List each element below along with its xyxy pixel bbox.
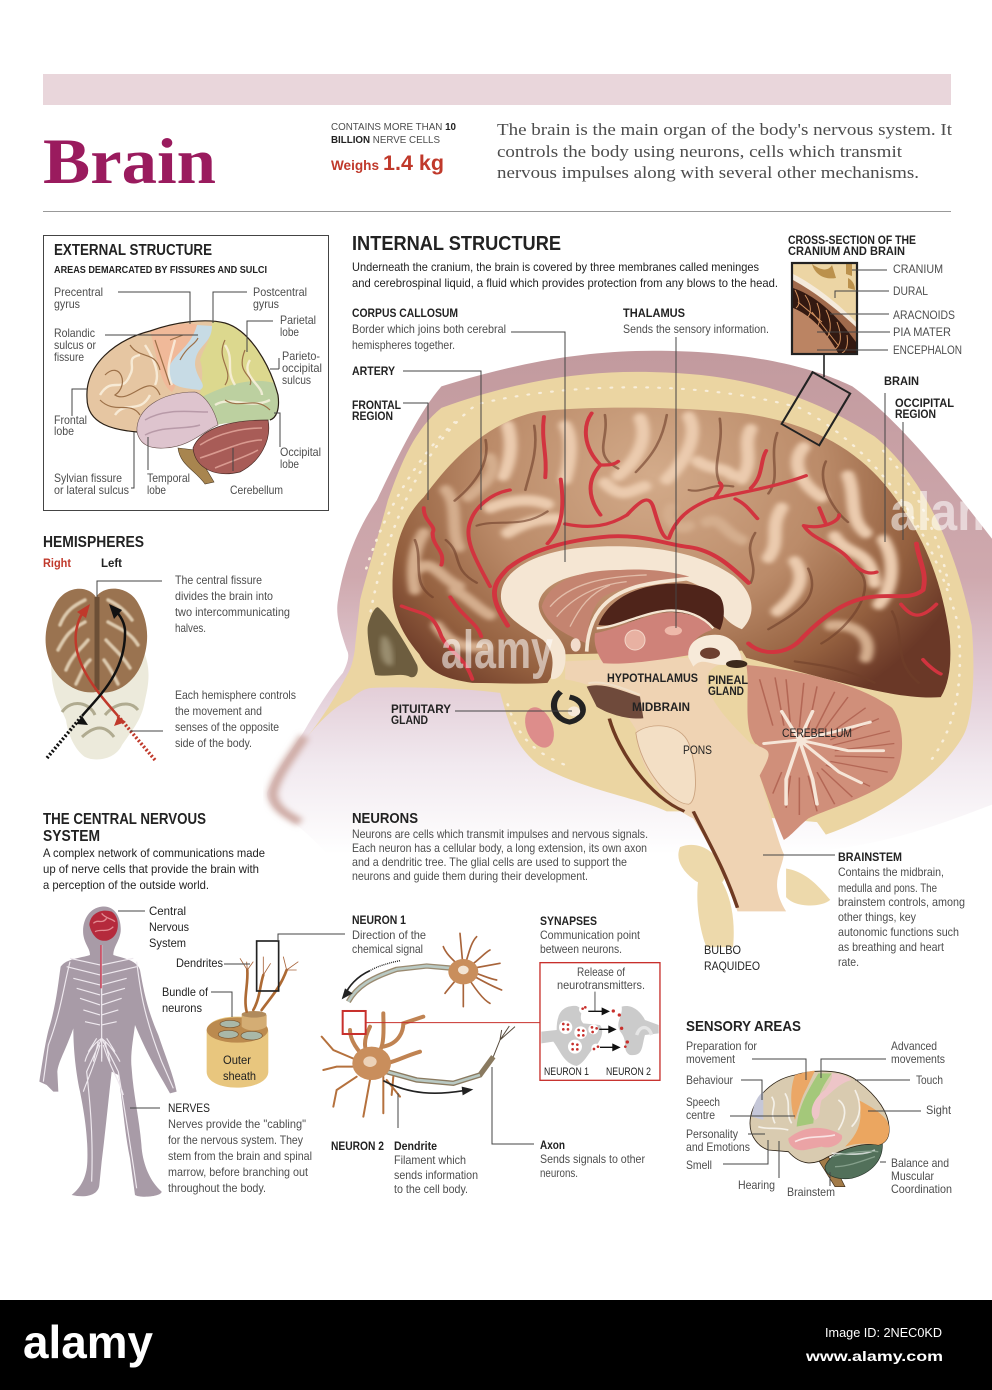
brainstem text: autonomic functions such — [838, 925, 959, 939]
frontal region label: REGION — [352, 409, 393, 423]
legend right left: Left — [101, 556, 122, 570]
sensory labels: Personality — [686, 1127, 738, 1141]
sensory labels: movements — [891, 1052, 945, 1066]
sensory labels: movement — [686, 1052, 736, 1066]
subheading: AREAS DEMARCATED BY FISSURES AND SULCI — [54, 264, 267, 276]
cns labels: System — [149, 936, 186, 950]
key facts: CONTAINS MORE THAN 10 — [331, 121, 456, 133]
heading internal structure: INTERNAL STRUCTURE — [352, 233, 561, 255]
crossing arrows — [47, 604, 155, 760]
human figure — [39, 907, 177, 1197]
labels left: Frontal — [54, 413, 87, 427]
skull with brain — [46, 589, 149, 759]
sensory labels: Brainstem — [787, 1185, 835, 1199]
structure labels: CEREBELLUM — [782, 726, 852, 740]
cns text — [43, 846, 265, 892]
heading sensory: SENSORY AREAS — [686, 1018, 801, 1035]
neuron 2 label: NEURON 2 — [331, 1139, 384, 1153]
labels left: occipital — [282, 361, 322, 375]
structure labels: OCCIPITAL — [895, 396, 954, 410]
synapse labels — [544, 965, 651, 1078]
panel: internal structure text — [352, 233, 965, 973]
panel: external structure — [44, 236, 328, 510]
structure labels: RAQUIDEO — [704, 959, 760, 973]
nerves text: NERVES — [168, 1101, 210, 1115]
dendrite label: Filament which — [394, 1153, 466, 1167]
brain hemisphere — [393, 408, 950, 697]
leader lines cns — [118, 911, 345, 1108]
structure labels — [391, 374, 954, 973]
corpus callosum label — [352, 306, 506, 352]
structure labels: REGION — [895, 407, 936, 421]
sensory labels: Muscular — [891, 1169, 934, 1183]
labels left: Postcentral — [253, 285, 307, 299]
corpus callosum label: hemispheres together. — [352, 338, 455, 352]
neurons text: Neurons are cells which transmit impulses and nervous signals. — [352, 827, 648, 841]
inner brain structures — [542, 570, 747, 719]
heading external structure: EXTERNAL STRUCTURE — [54, 242, 212, 259]
cns labels: Nervous — [149, 920, 189, 934]
frontal sinus — [368, 607, 418, 677]
footer logo: alamy — [23, 1316, 153, 1368]
inset heading: CRANIUM AND BRAIN — [788, 244, 905, 258]
neurons text: Each neuron has a cellular body, a long extension, its own axon — [352, 841, 647, 855]
corpus callosum label: Border which joins both cerebral — [352, 322, 506, 336]
neurons text: and a dendritic tree. The glial cells are used to support the — [352, 855, 627, 869]
sensory labels: Balance and — [891, 1156, 949, 1170]
labels left: sulcus or — [54, 338, 96, 352]
sensory labels — [686, 1039, 952, 1199]
brainstem text: medulla and pons. The — [838, 881, 937, 895]
neuron 1 — [348, 933, 502, 1007]
neurons text: neurons and guide them during their development. — [352, 869, 588, 883]
pons — [636, 726, 696, 804]
midbrain shadow and channels — [609, 719, 737, 908]
heading hemispheres: HEMISPHERES — [43, 534, 144, 551]
cerebellum — [746, 665, 902, 840]
leader lines hemispheres — [97, 581, 163, 731]
sensory labels: and Emotions — [686, 1140, 750, 1154]
sensory labels: Touch — [916, 1073, 943, 1087]
sensory brain — [750, 1071, 889, 1187]
labels left: gyrus — [253, 297, 279, 311]
direction arrows — [370, 961, 400, 971]
synapse labels: NEURON 1 — [544, 1066, 589, 1078]
neurons text — [352, 827, 648, 883]
inset labels: PIA MATER — [893, 325, 951, 339]
nerves text — [168, 1101, 312, 1195]
sensory leader lines — [723, 1059, 921, 1186]
structure labels: BRAIN — [884, 374, 919, 388]
cns text: a perception of the outside world. — [43, 878, 209, 892]
structure labels: BULBO — [704, 943, 741, 957]
nerves text: throughout the body. — [168, 1181, 266, 1195]
corpus callosum label: CORPUS CALLOSUM — [352, 306, 458, 320]
labels left: lobe — [280, 457, 299, 471]
cns labels: Dendrites — [176, 956, 223, 970]
bone pores — [366, 387, 960, 765]
structure labels: GLAND — [708, 684, 744, 698]
panel: neurons — [322, 811, 660, 1196]
intro text: controls the body using neurons, cells which transmit — [497, 142, 902, 161]
inset heading: CROSS-SECTION OF THE — [788, 233, 916, 247]
intro text: The brain is the main organ of the body's nervous system. It — [497, 120, 952, 139]
cns labels — [149, 904, 256, 1083]
structure labels: PINEAL — [708, 673, 748, 687]
brainstem text: as breathing and heart — [838, 940, 945, 954]
thalamus label — [623, 306, 769, 336]
inset labels: DURAL — [893, 284, 928, 298]
inset: cross-section of cranium — [788, 233, 962, 377]
inset image — [792, 263, 857, 354]
axon label: Sends signals to other — [540, 1152, 645, 1166]
neuron 1 label — [352, 913, 426, 956]
red marker — [343, 1011, 366, 1034]
brainstem — [565, 642, 786, 911]
heading cns: THE CENTRAL NERVOUS — [43, 811, 206, 828]
cns text: up of nerve cells that provide the brain with — [43, 862, 259, 876]
labels left: Precentral — [54, 285, 103, 299]
nose shading — [273, 736, 304, 822]
heading cns — [43, 811, 206, 845]
brainstem text: BRAINSTEM — [838, 850, 902, 864]
brainstem text: Contains the midbrain, — [838, 865, 944, 879]
watermark: alamy — [441, 620, 553, 680]
thalamus label: THALAMUS — [623, 306, 685, 320]
cross-section marker — [782, 372, 850, 445]
synapse box — [540, 963, 660, 1080]
synapses label: between neurons. — [540, 942, 622, 956]
nerve bundle — [207, 941, 298, 1088]
neuron 1 label: Direction of the — [352, 928, 426, 942]
axon label: Axon — [540, 1138, 565, 1152]
sensory labels: Advanced — [891, 1039, 937, 1053]
heading cns: SYSTEM — [43, 828, 100, 845]
frontal region label — [352, 398, 401, 423]
intro internal: Underneath the cranium, the brain is covered by three membranes called meninges — [352, 260, 759, 274]
corpus callosum — [501, 546, 752, 679]
structure labels: HYPOTHALAMUS — [607, 671, 698, 685]
labels left: Parietal — [280, 313, 316, 327]
key facts: Weighs — [331, 157, 379, 173]
dendrite label: sends information — [394, 1168, 478, 1182]
footer url: www.alamy.com — [805, 1348, 943, 1364]
synapse labels: Release of — [577, 965, 626, 979]
key facts — [331, 121, 456, 175]
watermark — [441, 482, 992, 680]
labels left: gyrus — [54, 297, 80, 311]
labels left: Occipital — [280, 445, 321, 459]
intro internal — [352, 260, 778, 290]
thalamus label: Sends the sensory information. — [623, 322, 769, 336]
footer bar — [0, 1300, 992, 1390]
key facts: BILLION NERVE CELLS — [331, 134, 440, 146]
panel: sensory areas — [686, 1018, 952, 1199]
dendrite label: Dendrite — [394, 1139, 437, 1153]
header band — [43, 74, 951, 105]
synapses label — [540, 914, 641, 956]
sensory labels: Coordination — [891, 1182, 952, 1196]
brainstem text: brainstem controls, among — [838, 895, 965, 909]
cns labels: sheath — [223, 1069, 256, 1083]
legend right left: Right — [43, 556, 71, 570]
nerves text: Nerves provide the "cabling" — [168, 1117, 306, 1131]
cns labels: Central — [149, 904, 186, 918]
inset labels: CRANIUM — [893, 262, 943, 276]
brainstem text: rate. — [838, 955, 859, 969]
labels left: or lateral sulcus — [54, 483, 129, 497]
sensory labels: Sight — [926, 1103, 952, 1117]
synapse labels: neurotransmitters. — [557, 978, 645, 992]
panel: hemispheres — [43, 534, 296, 760]
inset heading — [788, 233, 916, 258]
structure labels: PITUITARY — [391, 702, 451, 716]
title: Brain — [43, 126, 216, 198]
dendrite label — [394, 1139, 478, 1196]
pituitary — [520, 692, 583, 750]
inset labels: ARACNOIDS — [893, 308, 955, 322]
intro text: nervous impulses along with several other mechanisms. — [497, 163, 919, 182]
hemispheres text: senses of the opposite — [175, 720, 279, 734]
cns labels: neurons — [162, 1001, 202, 1015]
dendrite label: to the cell body. — [394, 1182, 468, 1196]
neuron diagram — [322, 933, 660, 1117]
structure labels: MIDBRAIN — [632, 700, 690, 714]
brainstem text — [838, 850, 965, 969]
heading neurons: NEURONS — [352, 811, 418, 827]
artery label: ARTERY — [352, 364, 395, 378]
nerves text: stem from the brain and spinal — [168, 1149, 312, 1163]
skin — [267, 351, 992, 854]
neuron 2 — [322, 1013, 515, 1117]
structure labels: GLAND — [391, 713, 428, 727]
leader lines internal — [403, 332, 903, 855]
cns labels: Outer — [223, 1053, 251, 1067]
labels left: Sylvian fissure — [54, 471, 122, 485]
synapses label: SYNAPSES — [540, 914, 597, 928]
labels left: lobe — [280, 325, 299, 339]
labels left: sulcus — [282, 373, 311, 387]
leader lines — [72, 292, 280, 488]
hemispheres text: Each hemisphere controls — [175, 688, 296, 702]
labels left — [54, 285, 322, 497]
nerves text: marrow, before branching out — [168, 1165, 309, 1179]
hemispheres text: divides the brain into — [175, 589, 273, 603]
frontal region label: FRONTAL — [352, 398, 401, 412]
cns text: A complex network of communications made — [43, 846, 265, 860]
panel: central nervous system — [39, 811, 345, 1197]
legend right left — [43, 556, 122, 570]
inset leader lines — [817, 270, 890, 350]
axon label: neurons. — [540, 1166, 578, 1180]
intro text — [497, 120, 952, 182]
hemispheres text: The central fissure — [175, 573, 262, 587]
structure labels: PONS — [683, 743, 712, 757]
neuron 1 label: chemical signal — [352, 942, 423, 956]
labels left: fissure — [54, 350, 84, 364]
sensory labels: Hearing — [738, 1178, 775, 1192]
main illustration: head cross-section — [267, 351, 992, 947]
hemispheres text: side of the body. — [175, 736, 252, 750]
labels left: Cerebellum — [230, 483, 283, 497]
skull bone — [307, 372, 973, 835]
key facts: 1.4 kg — [383, 152, 444, 175]
intro internal: and cerebrospinal liquid, a fluid which provides protection from any blows to the head. — [352, 276, 778, 290]
arteries — [402, 413, 941, 679]
sensory labels: centre — [686, 1108, 715, 1122]
sensory labels: Preparation for — [686, 1039, 757, 1053]
labels left: Temporal — [147, 471, 190, 485]
synapse labels: NEURON 2 — [606, 1066, 651, 1078]
sensory labels: Speech — [686, 1095, 720, 1109]
hemispheres text — [175, 573, 296, 750]
labels left: Rolandic — [54, 326, 95, 340]
sensory labels: Smell — [686, 1158, 712, 1172]
nerves text: for the nervous system. They — [168, 1133, 303, 1147]
axon label — [540, 1138, 645, 1180]
sensory labels: Behaviour — [686, 1073, 733, 1087]
image id: Image ID: 2NEC0KD — [825, 1325, 942, 1340]
neuron 1 label: NEURON 1 — [352, 913, 406, 927]
brainstem text: other things, key — [838, 910, 916, 924]
labels left: lobe — [54, 424, 74, 438]
hemispheres text: two intercommunicating — [175, 605, 290, 619]
brain lateral view — [87, 320, 281, 484]
neuron leader lines — [398, 1067, 534, 1144]
inset labels: ENCEPHALON — [893, 343, 962, 357]
synapses label: Communication point — [540, 928, 641, 942]
inset labels — [893, 262, 962, 357]
vertebrae — [678, 845, 830, 947]
hemispheres text: halves. — [175, 621, 206, 635]
hemispheres text: the movement and — [175, 704, 262, 718]
labels left: Parieto- — [282, 349, 320, 363]
cns labels: Bundle of — [162, 985, 209, 999]
labels left: lobe — [147, 483, 166, 497]
